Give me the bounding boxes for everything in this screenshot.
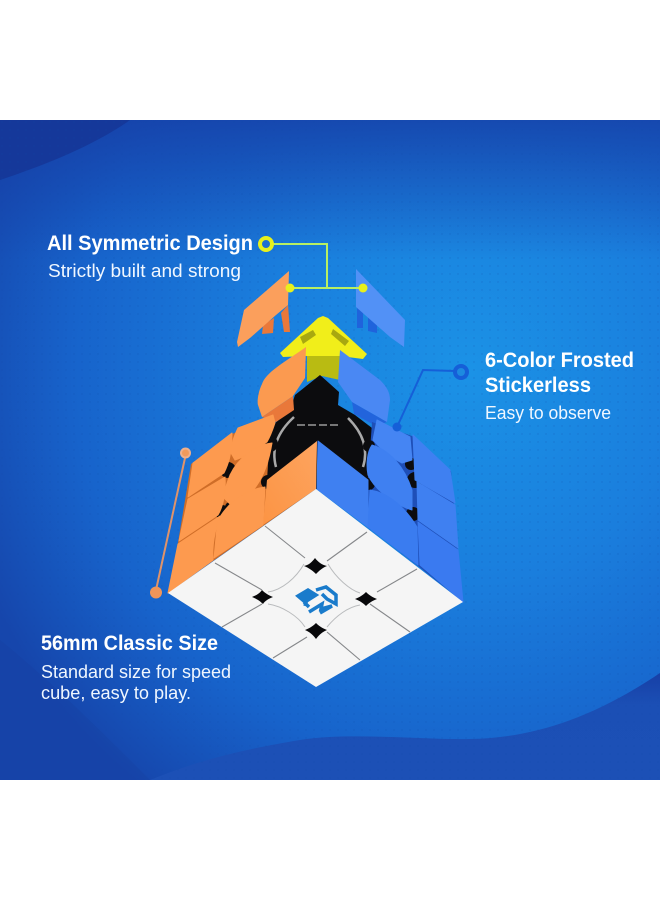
cube core: [258, 375, 382, 489]
text: all symmetric design: Strictly built and strong: [48, 260, 241, 281]
cube left orange face: [168, 415, 317, 593]
text: 56mm classic size: 56mm Classic Size: [41, 632, 218, 655]
orange edge flap: [237, 271, 290, 347]
text: 6-color frosted stickerless: 6-Color Frosted: [485, 349, 634, 372]
text: 6-color frosted stickerless: [485, 349, 634, 423]
callout: symmetric design connector: [260, 238, 368, 292]
callout: stickerless connector: [392, 366, 467, 432]
text: 6-color frosted stickerless: Stickerless: [485, 374, 591, 397]
text: all symmetric design: [47, 232, 253, 281]
cube right blue face: [317, 420, 463, 602]
text: 56mm classic size: cube, easy to play.: [41, 682, 191, 703]
orange middle edge: [258, 347, 306, 422]
text: all symmetric design: All Symmetric Design: [47, 232, 253, 255]
cube exploded top pieces: [237, 269, 405, 382]
yellow corner cap: [280, 316, 367, 382]
orange tiles: [188, 433, 232, 497]
text: 6-color frosted stickerless: Easy to observe: [485, 402, 611, 423]
text: 56mm classic size: Standard size for speed: [41, 661, 231, 682]
icon: GAN logo: [298, 587, 336, 613]
blue middle edge: [338, 350, 390, 426]
black junctions: [304, 558, 327, 574]
blue tiles: [317, 441, 368, 527]
text: 56mm classic size: [41, 632, 231, 703]
callout: size connector: [150, 448, 190, 598]
blue edge flap: [356, 269, 405, 347]
tile seams: [215, 526, 417, 660]
cube top white face: [168, 489, 463, 687]
background panel: [0, 120, 660, 780]
